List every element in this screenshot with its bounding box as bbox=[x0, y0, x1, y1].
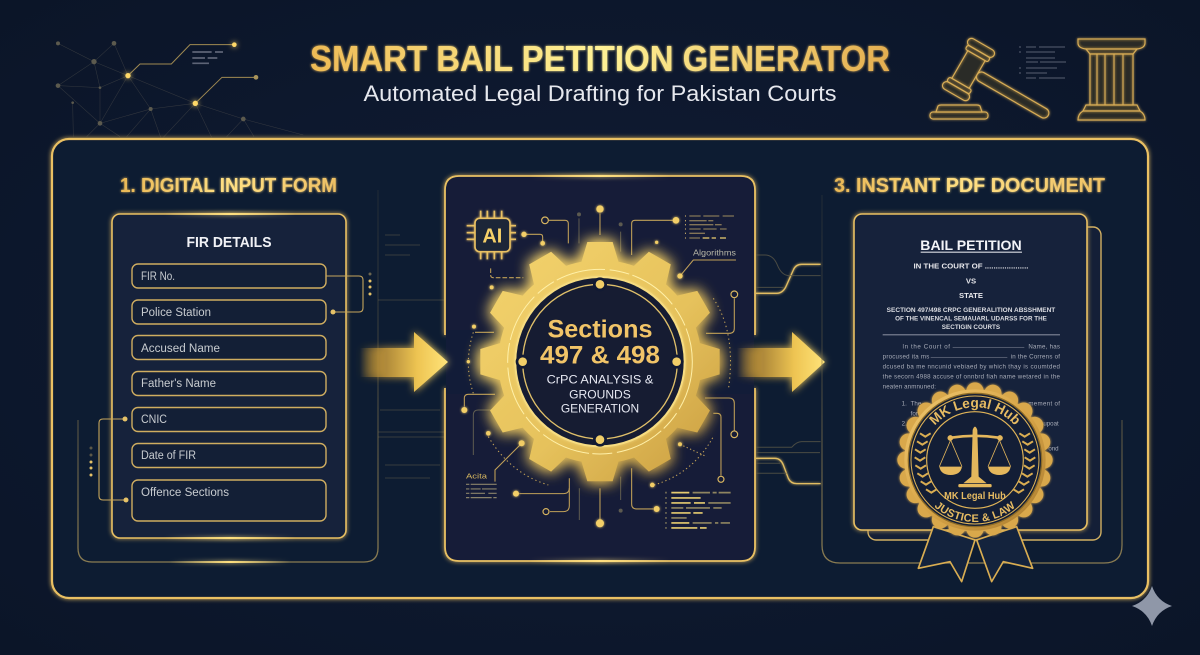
connector dots bbox=[90, 272, 372, 502]
panel fill bbox=[446, 330, 754, 394]
gear text: GENERATION bbox=[561, 402, 639, 416]
main panel bbox=[52, 139, 1148, 598]
form heading: FIR DETAILS bbox=[186, 235, 272, 251]
panel frame bbox=[78, 190, 378, 562]
arrow: input to analysis bbox=[360, 332, 448, 392]
body paragraph: In the Court of bbox=[902, 343, 950, 350]
dim nodes bbox=[577, 212, 623, 513]
field labels: Accused Name bbox=[141, 343, 220, 355]
body paragraph: dcused ba me nncunid vebiaed by which thay is coumtded bbox=[883, 364, 1061, 371]
gear text: GROUNDS bbox=[569, 387, 631, 401]
gear text: Sections bbox=[547, 315, 652, 343]
body paragraph: procused ita ms bbox=[883, 354, 929, 361]
heading: instant PDF document: 3. INSTANT PDF DOCUMENT bbox=[834, 175, 1105, 197]
seal arc text: MK Legal Hub bbox=[928, 399, 1019, 425]
label: Algorithms: Algorithms bbox=[693, 248, 736, 258]
body paragraph: the secorn 4988 accuse of onnbrd fiah name wetared in the bbox=[883, 374, 1061, 381]
heading: digital input form: 1. DIGITAL INPUT FORM bbox=[120, 175, 337, 197]
panel: AI analysis bbox=[445, 175, 755, 562]
section lines: SECTIGIN COURTS bbox=[942, 324, 1000, 331]
body paragraph: for bbox=[911, 410, 918, 417]
body paragraph: 1. bbox=[902, 400, 907, 407]
input fields bbox=[132, 264, 326, 521]
panel frame lower bbox=[445, 388, 755, 561]
panel: PDF document bbox=[822, 175, 1122, 563]
data text bars top bbox=[685, 216, 734, 238]
title: SMART BAIL PETITION GENERATOR bbox=[310, 38, 890, 79]
connectors to document bbox=[756, 255, 821, 484]
front page bbox=[854, 214, 1087, 530]
panel: digital input form bbox=[78, 175, 378, 563]
scalloped edge bbox=[897, 382, 1053, 538]
icon: AI chip: AI bbox=[482, 225, 502, 247]
circuit traces bbox=[464, 213, 736, 520]
icon: pillar bbox=[1078, 39, 1145, 120]
data text bars bottom right bbox=[665, 493, 731, 528]
court lines: STATE bbox=[959, 291, 983, 300]
seal: MK Legal Hub bbox=[896, 380, 1054, 582]
field labels: Father's Name bbox=[141, 378, 216, 390]
seal motto: JUSTICE & LAW bbox=[935, 500, 1014, 522]
section lines: OF THE VINENCAL SEMAUARL UDARSS FOR THE bbox=[895, 315, 1047, 322]
decorative text bars bbox=[1019, 47, 1066, 78]
icon: gear bbox=[467, 230, 733, 497]
icon: gavel bbox=[930, 37, 1063, 141]
panel highlights bbox=[530, 175, 670, 562]
ribbon tails bbox=[918, 527, 1033, 582]
seal name: MK Legal Hub bbox=[944, 491, 1006, 502]
ring nodes bbox=[542, 217, 738, 515]
field labels: Police Station bbox=[141, 307, 211, 319]
field labels: Date of FIR bbox=[141, 450, 196, 462]
field labels: CNIC bbox=[141, 414, 167, 426]
gear text: 497 & 498 bbox=[540, 341, 660, 369]
network graphic bbox=[56, 41, 303, 137]
gear centre bbox=[508, 269, 692, 454]
highlights bbox=[165, 213, 295, 563]
arrow: analysis to document bbox=[737, 332, 825, 392]
panel frame bbox=[822, 195, 1122, 563]
body paragraph: mement of bbox=[1028, 400, 1060, 407]
scales of justice bbox=[939, 427, 1011, 487]
laurels bbox=[915, 433, 1035, 493]
connector traces bbox=[378, 235, 445, 478]
form connectors bbox=[99, 276, 363, 500]
icon: AI chip bbox=[467, 211, 516, 259]
panel frame bbox=[445, 176, 755, 335]
label: Acita bbox=[466, 471, 497, 498]
document title: BAIL PETITION bbox=[920, 237, 1022, 253]
field labels: Offence Sections bbox=[141, 487, 229, 499]
gear text bbox=[540, 315, 660, 416]
field labels: FIR No. bbox=[141, 271, 175, 283]
back page bbox=[868, 227, 1101, 540]
document text bbox=[883, 237, 1061, 452]
section lines bbox=[887, 307, 1056, 331]
body paragraph: upoat bbox=[1043, 421, 1059, 428]
court lines: VS bbox=[966, 276, 976, 285]
form card bbox=[112, 214, 346, 538]
body paragraph: ond bbox=[1048, 445, 1059, 452]
circuit artwork bbox=[461, 205, 738, 528]
body paragraph bbox=[883, 343, 1061, 452]
court lines: IN THE COURT OF .................... bbox=[913, 262, 1028, 271]
body paragraph: neaten anmnuned: bbox=[883, 384, 936, 391]
section lines: SECTION 497/498 CRPC GENERALITION ABSSHMENT bbox=[887, 307, 1056, 314]
subtitle: Automated Legal Drafting for Pakistan Courts bbox=[364, 81, 836, 106]
circuit nodes bbox=[461, 205, 683, 527]
court lines bbox=[913, 262, 1028, 300]
body paragraph: 2. bbox=[902, 421, 907, 428]
body paragraph: Name, has bbox=[1028, 343, 1060, 350]
field labels bbox=[141, 271, 229, 499]
body paragraph: The bbox=[911, 400, 922, 407]
icon: sparkle bbox=[1132, 586, 1172, 626]
body paragraph: in the Correns of bbox=[1011, 354, 1060, 361]
label: Acita: Acita bbox=[466, 471, 488, 480]
gear text: CrPC ANALYSIS & bbox=[547, 373, 653, 387]
